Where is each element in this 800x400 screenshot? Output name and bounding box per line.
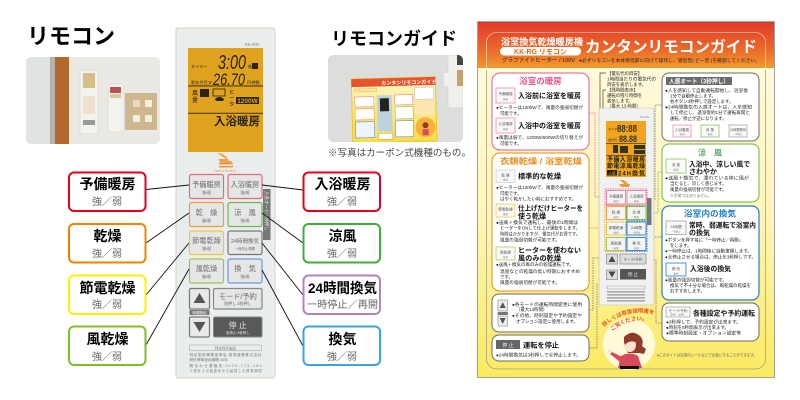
panel: cool breeze [662,144,759,202]
key: cool breeze: 涼 風 [672,162,680,167]
callout: pre-heat: 強／弱 [92,195,122,208]
panel notes: display [600,70,656,132]
remote LCD display: ヒ [229,89,235,96]
guide LCD [606,121,646,178]
guide side bar [647,198,652,225]
callout: wind dry: 強／弱 [92,350,122,363]
guide LCD: 88.88 [619,134,637,144]
panel: clothes drying: 温度などの乾燥の低い時期におすすめ [500,268,580,275]
key: wind dry: 風乾燥 [500,250,511,254]
guide button: up [606,254,618,264]
button: cool breeze [228,202,262,226]
side label: motion auto [263,189,270,240]
footnote: ●このガイドは浴室内シールなどでお使いすることができます。 [657,352,757,358]
panel: motion auto: 運転／停止が逆になります。 [670,115,727,122]
side label: motion auto: 入各オート:3秒押し [263,191,270,231]
callout: ventilation: 換気 [328,331,356,347]
panel: motion auto: ●人を感知して自動運転開始し、浴室後 [665,87,749,94]
remote LCD display: タ [229,100,235,108]
panel: ventilation: ●ボタンを押す毎に「一時停止／再開」 [665,236,743,244]
panel: bathroom heating: 入浴前に浴室を暖房 [518,91,581,100]
key: eco dry [496,204,515,217]
button: pre-heat [190,174,224,198]
guide button: 24h: 24時間 [631,225,642,230]
printed rating label: 設計標準使用期間:10年 [190,357,228,362]
remote LCD display [188,48,263,152]
icon: woman [608,333,646,369]
button: stop [214,317,262,337]
key: cool breeze: 強/弱 [674,168,678,172]
button: bath heating: 入浴暖房 [231,180,259,189]
guide button: dry: 強/弱 [614,215,618,219]
callout: dry: 乾燥 [94,228,122,244]
button: dry: 乾 燥 [196,208,217,217]
panel: cool breeze: ※冷房ではありません。 [670,193,712,198]
guide button: pre-heat [606,190,626,204]
button: dry: 強/弱 [202,217,211,223]
guide button: bath heating: 入浴暖房 [629,194,644,198]
panel: settings: ●3秒押しで、予約設定が出来ます。 [666,318,741,326]
callout bubble with character: ご覧ください。 [610,316,644,330]
panel notes: display: 【電気代の目安】 [607,70,642,77]
guide button: mode [620,254,646,264]
panel: clothes drying: ●送風＋換気で運転し、最後の1時間は [496,219,579,226]
callout: dry: 強／弱 [92,247,122,260]
guide button: dry: 乾 燥 [612,210,620,214]
callout: pre-heat [69,172,146,211]
remote control [176,28,275,378]
dashed connectors [589,105,662,348]
guide button: pre-heat: 強/弱 [614,199,618,203]
callout bubble with character [602,308,655,370]
panel heading: 衣類乾燥 / 浴室乾燥 [500,156,582,166]
button: 24h ventilation: 24時間換気 [231,237,259,245]
panel: clothes drying: です。 [500,274,513,280]
key: pre-heat: 強/弱 [503,97,508,101]
button: dry [190,202,224,226]
button: bath heating: 強/弱 [240,189,250,195]
photo: guide sheet on wall: カンタンリモコンガイド [381,78,436,87]
callout: bath heating [304,172,380,211]
guide button: eco dry [606,222,626,235]
panel: motion auto: 各ボタン3秒押しで設定します。 [670,98,733,105]
guide header band: 浴室換気乾燥暖房機 [501,36,583,47]
guide LCD: 電気代 [608,137,617,142]
label: time setting [190,310,210,315]
panel notes: display: 目安を表示します。 [607,81,646,88]
mini key: cool breeze: 強/弱 [708,132,712,136]
guide button: bath heating: 強/弱 [634,199,639,203]
key: cool breeze [666,159,686,173]
panel: settings: ●時刻を5秒間表示が出来ます。 [666,324,729,331]
panel: cool breeze: ●送風＋換気で、濡れている体に風が [665,174,750,182]
button: stop: 停 止 [229,320,247,330]
panel heading: 涼 風 [698,148,722,158]
panel: clothes drying: 仕上げだけヒーターを [518,204,583,212]
panel: clothes drying: ヒーターを使わない [518,246,581,254]
remote LCD display: ー [229,96,235,102]
guide button: stop: 停 止 [628,271,639,277]
key: ventilation [666,263,686,276]
guide remote illustration: KK-RG [640,115,650,119]
remote LCD display: 電気代目安 [191,80,212,85]
guide header band: ●必ずリモコンを本体受信部に向けて操作し、受信音( ピー音 )を確認してください。 [579,57,760,64]
key: 24h: 一時停止 [672,230,681,234]
remote LCD display: 風 [192,90,198,97]
guide button: pre-heat: 予備暖房 [609,194,624,198]
panel: motion auto: して停止し、退室後約1分で運転再開と [670,109,750,116]
callout: pre-heat: 予備暖房 [80,176,136,192]
panel heading: 浴室の暖房 [519,76,562,86]
remote LCD display: 量 [192,97,198,104]
button: ventilation: 強/弱 [240,273,250,279]
key: 24h: 24時間 [670,224,682,229]
button: mode: モード/予約 [219,292,257,301]
panel: clothes drying: 風のみの乾燥 [518,254,561,262]
guide button: down [606,270,618,280]
callout: bath heating: 強／弱 [327,195,357,208]
key: bath heating [496,118,515,133]
panel: stop: 運転を停止 [523,340,559,350]
mini key: bath heating [673,125,691,137]
panel: settings: ●標準時刻設定・オプション設定等 [666,330,742,336]
panel: clothes drying: 風量の強弱切替が可能です。 [500,236,560,244]
printed rating label: 特定保守製品 [215,346,236,350]
callout: cool breeze: 強／弱 [327,247,357,260]
callout: 24h ventilation [304,276,380,314]
label: time setting: 時間設定 [192,310,207,315]
printed rating label: ※設計上の製造年から起算した標準期間 [190,368,262,373]
panel: ventilation: 常時、弱運転で浴室内 [689,220,756,230]
panel: clothes drying: 標準的な乾燥 [518,172,561,180]
button: eco dry: 節電乾燥 [192,236,221,245]
button: pre-heat: 強/弱 [202,189,211,195]
callout: eco dry: 強／弱 [92,298,122,311]
guide header band [478,22,774,370]
panel: clothes drying [492,153,589,291]
guide button: mode: モード/予約 [624,256,643,262]
key: dry [496,170,515,182]
callout: dry [69,224,146,262]
bubble message: 詳しくは取扱説明書を [602,308,654,327]
guide header band: カンタンリモコンガイド [585,38,757,56]
key: up and down [498,300,508,326]
guide LCD: 人感 [608,170,616,176]
callout: ventilation [304,326,380,365]
guide button: eco dry: 強/弱 [614,230,618,234]
panel: ventilation: ●全停止させる場合は、停止を3秒押しです。 [665,254,756,260]
guide button: dry [606,206,626,220]
panel: bathroom heating: 可能です。 [500,110,522,117]
guide remote illustration [599,108,654,305]
guide button: ventilation: 強/弱 [634,246,639,250]
photo caption: ※写真はカーボン式機種のもの。 [328,147,471,159]
printed rating label: 問合わせ連絡先:0120-775-181 [190,363,262,368]
panel: motion auto: ●24時間換気の人感オートは、人を感知 [665,104,752,110]
mini key: bath heating: 入浴暖房 [675,127,690,132]
printed rating label: 特定製造事業者等名:高須産業株式会社 [190,352,262,357]
maker logo [214,153,236,173]
key: ventilation: 強/弱 [674,272,678,276]
key: eco dry: 強/弱 [503,212,508,216]
button: wind dry: 強/弱 [202,273,211,279]
button: cool breeze: 強/弱 [240,217,250,223]
key: bath heating: 強/弱 [503,127,508,131]
panel: cool breeze: 入浴中、涼しい風で [689,160,750,168]
heading: remote: リモコン [27,24,115,49]
mini key: cool breeze [701,125,719,137]
key: eco dry: 節電乾燥 [498,206,513,212]
panel: clothes drying: ヒーターをONして仕上げ運転をします。 [500,224,580,232]
guide button: ventilation [627,238,646,250]
panel: clothes drying: ●ヒーターは1200Wで、風量の強弱切替が [496,184,584,191]
panel notes: display: 表示します。 [607,98,633,104]
guide button: ventilation: 換 気 [632,240,641,246]
callout: wind dry [69,326,146,365]
panel: settings [662,303,759,341]
guide button: cool breeze [627,206,646,220]
mini key: 24h [729,125,747,137]
key: bath heating: 入浴暖房 [498,121,513,126]
guide dashed groups [605,189,647,252]
panel: motion auto: 1分で自動停止します。 [670,92,716,100]
button: eco dry: 強/弱 [202,245,211,251]
panel: clothes drying: 時間はかかりますが、電気代がお得です。 [500,230,580,238]
panel: ventilation: おすすめします。 [670,288,705,294]
mini key: 24h: 24時間換気 [730,127,746,132]
key: wind dry: 強/弱 [503,255,508,259]
callout: 24h ventilation: 一時停止／再開 [307,298,378,311]
button: pre-heat: 予備暖房 [192,180,221,189]
remote LCD display: 円/時間 [247,80,260,85]
heading: remote guide: リモコンガイド [331,29,457,49]
panel: ventilation: ●一時停止は、1時間後に自動復帰します。 [665,248,752,254]
callout: 24h ventilation: 24時間換気 [308,280,377,296]
remote LCD display: 26.70 [212,70,245,89]
panel notes: display: （最大 13 時間） [607,102,641,110]
remote LCD display: 3:00 [218,52,246,74]
button: 24h ventilation: 一時停止/再開 [235,246,255,251]
button: mode [214,288,262,309]
panel: bathroom heating: ●ヒーターは1200Wで、風量の強弱切替が [496,104,584,111]
remote LCD display: 入浴暖房 [214,114,260,128]
callout: ventilation: 強／弱 [327,350,357,363]
callout: eco dry [69,276,146,314]
button: wind dry: 風乾燥 [196,264,217,273]
mini key: bath heating: 強/弱 [680,132,684,136]
guide logo [619,180,630,187]
panel: motion auto [662,73,759,141]
panel: time adjustment: （最大13時間） [516,306,547,313]
panel: ventilation: をします。 [670,242,692,249]
remote control: KK-RG [245,42,260,47]
panel: bathroom heating [492,73,589,150]
guide sheet [477,21,775,378]
guide LCD: タイマー [608,126,620,131]
panel: clothes drying: はやく乾かしたい時におすすめです。 [500,196,576,202]
panel: bathroom heating: 入浴中の浴室を暖房 [518,121,581,130]
panel: cool breeze: さわやか [689,167,717,176]
panel: bathroom heating: ●風量は弱で、1200W/600Wの切り替えが [496,134,584,141]
button: up [190,288,210,309]
remote LCD display: タイマー [191,63,207,69]
button: stop: 全停止:3秒押し [226,330,250,335]
guide LCD: 88:88 [617,124,637,135]
panel: bathroom heating: 可能です。 [500,140,522,147]
button: mode: 短押し 3秒押し [224,300,251,306]
panel: clothes drying: 使う乾燥 [518,212,546,220]
panel: clothes drying: 可能です。 [500,190,522,197]
guide LCD: 節電涼風乾燥 [607,162,645,170]
guide button: cool breeze: 強/弱 [634,215,639,219]
guide button: 24h: 一時停止 [632,230,642,234]
connector lines [146,185,303,346]
key: ventilation: 換 気 [672,266,680,271]
button: ventilation: 換 気 [234,264,256,273]
button: cool breeze: 涼 風 [234,208,256,217]
guide button: wind dry [606,238,626,250]
button: ventilation [228,259,262,283]
key: dry: 乾 燥 [501,172,510,178]
button: down [190,317,210,337]
guide LCD: 24H換気 [618,170,645,178]
callout: cool breeze [304,224,380,262]
remote LCD display: 1200W [237,98,259,105]
guide button: 24h [627,222,646,235]
panel: clothes drying: 風量の強弱切替が可能です。 [500,279,560,286]
panel: cool breeze: 当たると、涼しく感じます。 [670,180,726,187]
key: 24h [666,221,686,234]
photo: guide sheet on wall [328,55,463,143]
guide button: bath heating [627,190,646,204]
panel: clothes drying: ●送風＋換気の風のみの乾燥運転です。 [496,261,574,268]
panel: stop: ●24時間換気は3秒押しで全停止します。 [496,352,581,358]
panel notes: display: 1時間当たりの電気代の [607,76,656,82]
button: bath heating [228,174,262,198]
key: stop: 停 止 [502,342,514,349]
panel: ventilation: 入浴後の換気 [690,264,731,273]
panel: ventilation: 換気で不十分な場合は、風乾燥の乾燥を [670,282,751,289]
printed rating label [190,345,262,373]
panel: settings: 各種設定や予約運転 [693,308,755,318]
panel heading: 人感オート（3秒押し） [669,78,729,86]
guide button: wind dry: 風乾燥 [611,240,622,246]
callout: eco dry: 節電乾燥 [80,280,136,296]
key: dry: 強/弱 [503,178,508,182]
guide button: eco dry: 節電乾燥 [609,225,624,230]
panel: cool breeze: 風量の強弱切替が可能です。 [670,186,727,193]
callout: cool breeze: 涼風 [328,228,356,244]
panel: time adjustment [492,294,589,332]
guide button: cool breeze: 涼 風 [632,210,641,214]
key: mode: 短押し 3秒押し [671,312,685,316]
callout: bath heating: 入浴暖房 [314,176,370,192]
panel notes: display: 【残時間表示】 [607,86,638,94]
guide print label [607,286,645,302]
panel: time adjustment: ●その他、時刻設定や予約設定や [512,312,582,319]
panel notes: display: 運転の残り時間を [607,92,642,99]
panel: time adjustment: ●各モードの運転時間変更に使用 [512,301,582,308]
button: wind dry [190,259,224,283]
key: wind dry [496,247,515,260]
guide header band: グラファイトヒーター / 100V [502,56,575,64]
guide button: wind dry: 強/弱 [614,246,618,250]
panel heading: 浴室内の換気 [684,208,736,218]
mini key: cool breeze: 涼 風 [706,127,714,132]
guide header band: KK-RG リモコン [514,48,567,56]
panel: ventilation: の換気 [689,228,710,237]
photo: remote on wall [26,57,160,144]
key: pre-heat [496,88,515,103]
guide LCD: 予備入浴暖房 [607,156,645,164]
panel: time adjustment: オプション設定に使用します。 [516,318,578,325]
key: mode: モード/予約 [669,308,688,313]
remote LCD display: 後 [248,63,252,69]
panel: ventilation: ●風量の強弱切替が可能です。 [665,276,727,284]
maker logo: Heat & Breeze [214,169,236,173]
mini key: 24h: 一時停止 [734,132,743,136]
panel: stop [492,335,589,361]
button: eco dry [190,231,224,254]
panel: ventilation [662,206,759,300]
key: pre-heat: 予備暖房 [498,91,513,96]
callout: wind dry: 風乾燥 [86,331,128,347]
key: mode [666,307,690,317]
guide button: stop [620,269,646,280]
button: 24h ventilation [228,231,262,254]
